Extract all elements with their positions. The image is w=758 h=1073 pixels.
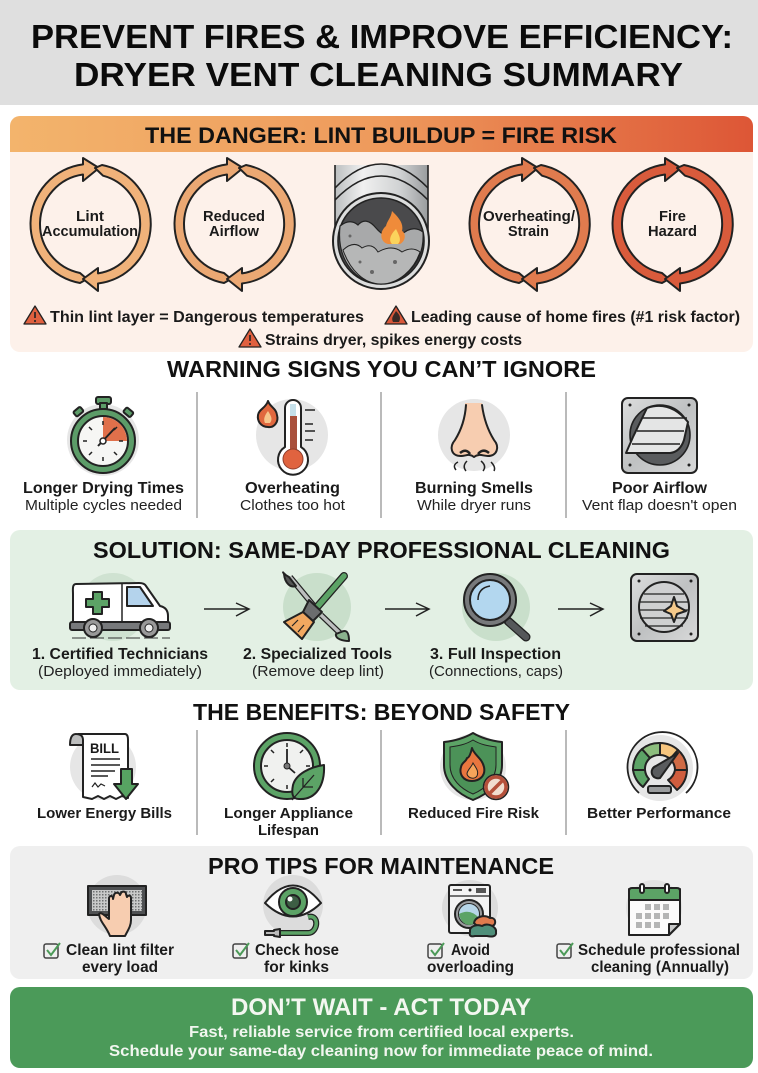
benefit: lower energy bills: Lower Energy Bills	[37, 806, 172, 822]
benefit: reduced fire risk: Reduced Fire Risk	[408, 806, 540, 822]
panel: the danger	[10, 116, 753, 352]
cycle: reduced airflow: Reduced	[203, 209, 265, 225]
icon: stopwatch	[67, 397, 139, 476]
tip: avoid overloading: Avoid	[451, 942, 490, 959]
step 2: specialized tools: (Remove deep lint)	[252, 664, 384, 680]
cycle: overheating and strain	[470, 158, 590, 291]
step 1: certified technicians: (Deployed immediately)	[38, 664, 202, 680]
CTA text: Fast, reliable service from certified local experts.	[189, 1024, 574, 1041]
benefit: longer appliance lifespan	[224, 733, 353, 839]
checkbox	[557, 943, 573, 958]
icon: eye and hose	[263, 875, 323, 937]
cycle: fire hazard	[613, 158, 733, 291]
benefit: longer appliance lifespan: Lifespan	[258, 823, 319, 839]
title: PREVENT FIRES & IMPROVE EFFICIENCY:	[31, 18, 733, 55]
title: DRYER VENT CLEANING SUMMARY	[74, 56, 683, 93]
cycle: overheating and strain: Strain	[508, 224, 549, 240]
sign: longer drying times	[23, 397, 184, 514]
sign: poor airflow: Vent flap doesn't open	[582, 498, 737, 514]
cycle: fire hazard: Fire	[659, 209, 686, 225]
cycle: overheating and strain: Overheating/	[483, 209, 575, 225]
cycle: reduced airflow: Airflow	[209, 224, 260, 240]
tip: check hose: Check hose	[255, 942, 339, 959]
tip: schedule professional cleaning: cleaning (Annually)	[591, 959, 729, 976]
sign: overheating: Overheating	[245, 480, 340, 497]
title	[31, 18, 733, 93]
heading: pro tips: PRO TIPS FOR MAINTENANCE	[208, 853, 554, 879]
illustration: lint-clogged duct with flame	[333, 164, 429, 289]
arrow: step 1 to 2	[204, 603, 249, 616]
cycle: reduced airflow	[175, 158, 295, 291]
tip: clean lint filter: every load	[82, 959, 158, 976]
tip: check hose	[233, 875, 339, 976]
icon: hand on lint filter	[87, 875, 147, 936]
danger heading bar: THE DANGER: LINT BUILDUP = FIRE RISK	[145, 123, 617, 148]
benefit: reduced fire risk	[408, 733, 540, 822]
step 2: specialized tools	[243, 572, 392, 680]
icon: calendar	[626, 880, 682, 936]
benefit: better performance	[587, 732, 731, 822]
sign: poor airflow	[582, 398, 737, 514]
warning: leading cause of fires: Leading cause of home fires (#1 risk factor)	[411, 309, 740, 326]
CTA text: Schedule your same-day cleaning now for immediate peace of mind.	[109, 1043, 653, 1060]
icon: crossed brushes	[283, 572, 351, 641]
checkbox	[44, 943, 60, 958]
icon: performance gauge	[627, 732, 698, 801]
section: benefits	[37, 730, 731, 839]
CTA heading: DON’T WAIT - ACT TODAY	[231, 994, 531, 1021]
warning: strains dryer: Strains dryer, spikes energy costs	[265, 332, 522, 349]
panel: pro tips	[10, 846, 753, 979]
benefit: longer appliance lifespan: Longer Appliance	[224, 806, 353, 822]
step 3: full inspection: (Connections, caps)	[429, 664, 563, 680]
sign: longer drying times: Longer Drying Times	[23, 480, 184, 497]
tip: clean lint filter: Clean lint filter	[66, 942, 174, 959]
sign: overheating: Clothes too hot	[240, 498, 345, 514]
header banner	[0, 0, 758, 105]
benefit: lower energy bills	[37, 734, 172, 822]
danger heading bar	[10, 116, 753, 152]
tip: avoid overloading: overloading	[427, 959, 514, 976]
tip: schedule professional cleaning	[557, 880, 740, 976]
arrow: step 3 to clean vent	[558, 603, 603, 616]
icon: nose with smell lines	[438, 399, 510, 471]
tip: schedule professional cleaning: Schedule professional	[578, 942, 740, 959]
step 1: certified technicians: 1. Certified Technicians	[32, 646, 208, 663]
arrow: step 2 to 3	[385, 603, 429, 616]
icon: bill with down arrow: BILL	[90, 741, 119, 756]
icon: magnifying glass	[462, 573, 530, 641]
icon: clock with leaf	[254, 733, 324, 800]
icon: service van	[70, 573, 170, 641]
icon: thermometer with flame	[256, 399, 328, 475]
step 3: full inspection: 3. Full Inspection	[430, 646, 561, 663]
cycle: lint accumulation: Accumulation	[42, 224, 138, 240]
sign: overheating	[240, 399, 345, 514]
sign: burning smells: Burning Smells	[415, 480, 533, 497]
tip: avoid overloading	[427, 880, 514, 976]
sign: poor airflow: Poor Airflow	[612, 480, 708, 497]
cycle: fire hazard: Hazard	[648, 224, 697, 240]
step 2: specialized tools: 2. Specialized Tools	[243, 646, 392, 663]
warning: thin lint layer: Thin lint layer = Dangerous temperatures	[50, 309, 364, 326]
panel: call to action	[10, 987, 753, 1068]
icon: shield with flame	[440, 733, 508, 800]
tip: clean lint filter	[44, 875, 174, 976]
checkbox	[233, 943, 249, 958]
step 1: certified technicians	[32, 573, 208, 680]
cycle: lint accumulation: Lint	[76, 209, 104, 225]
sign: longer drying times: Multiple cycles needed	[25, 498, 182, 514]
tip: check hose: for kinks	[264, 959, 329, 976]
CTA text	[109, 1024, 653, 1060]
icon: overloaded washer	[442, 880, 498, 937]
step 3: full inspection	[429, 573, 563, 680]
cycle: lint accumulation	[31, 158, 151, 291]
panel: solution	[10, 530, 753, 690]
benefit: better performance: Better Performance	[587, 806, 731, 822]
heading: warning signs: WARNING SIGNS YOU CAN’T IGNORE	[167, 356, 596, 382]
sign: burning smells: While dryer runs	[417, 498, 531, 514]
icon: clean vent with sparkle	[631, 574, 698, 641]
heading: benefits: THE BENEFITS: BEYOND SAFETY	[193, 699, 570, 725]
sign: burning smells	[415, 399, 533, 514]
icon: stuck vent flap	[622, 398, 697, 473]
checkbox	[428, 943, 444, 958]
section: warning signs	[23, 392, 737, 518]
heading: solution: SOLUTION: SAME-DAY PROFESSIONAL CLEANING	[93, 537, 670, 563]
